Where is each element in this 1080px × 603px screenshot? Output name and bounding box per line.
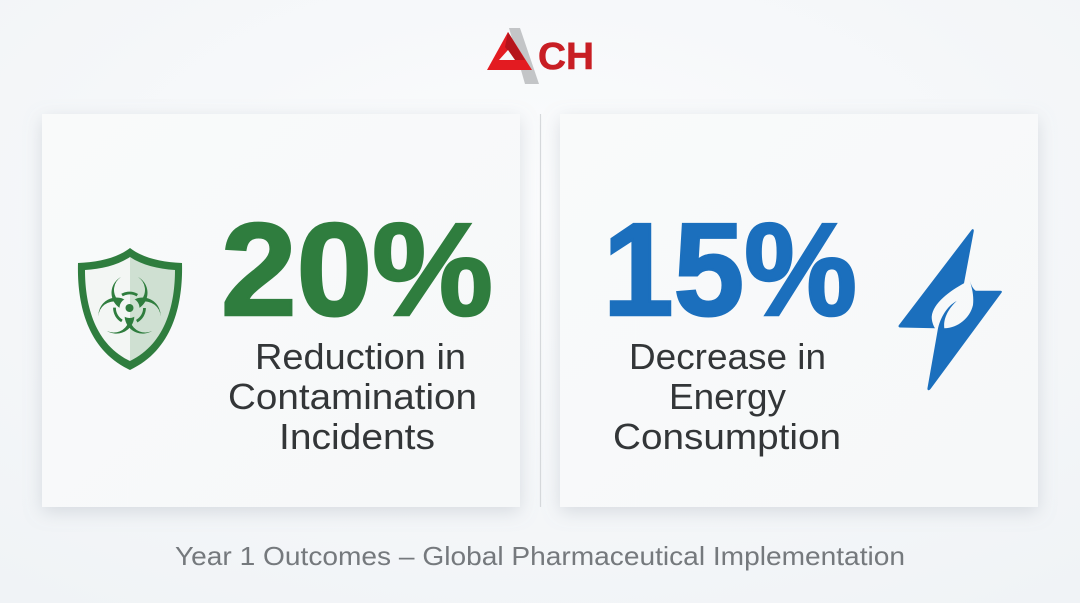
logo: ACH: CH — [538, 36, 594, 78]
text: reduction in contamination incidents: Incidents — [279, 416, 435, 457]
text: reduction in contamination incidents — [228, 336, 477, 457]
text: reduction in contamination incidents: Reduction in — [255, 336, 466, 377]
text: decrease in energy consumption — [613, 336, 841, 457]
text: decrease in energy consumption: Consumption — [613, 416, 841, 457]
icon: lightning bolt with leaf — [898, 229, 1002, 390]
text: decrease in energy consumption: Energy — [669, 376, 786, 417]
icon: biohazard shield — [78, 248, 182, 370]
logo: ACH — [487, 28, 594, 84]
stat: 20%: 20% — [221, 196, 493, 343]
text: decrease in energy consumption: Decrease in — [629, 336, 826, 377]
panel: energy decrease — [560, 114, 1038, 507]
text: reduction in contamination incidents: Contamination — [228, 376, 477, 417]
caption: Year 1 Outcomes – Global Pharmaceutical Implementation — [175, 541, 905, 571]
panel: contamination reduction — [42, 114, 520, 507]
stat: 15%: 15% — [603, 196, 857, 343]
